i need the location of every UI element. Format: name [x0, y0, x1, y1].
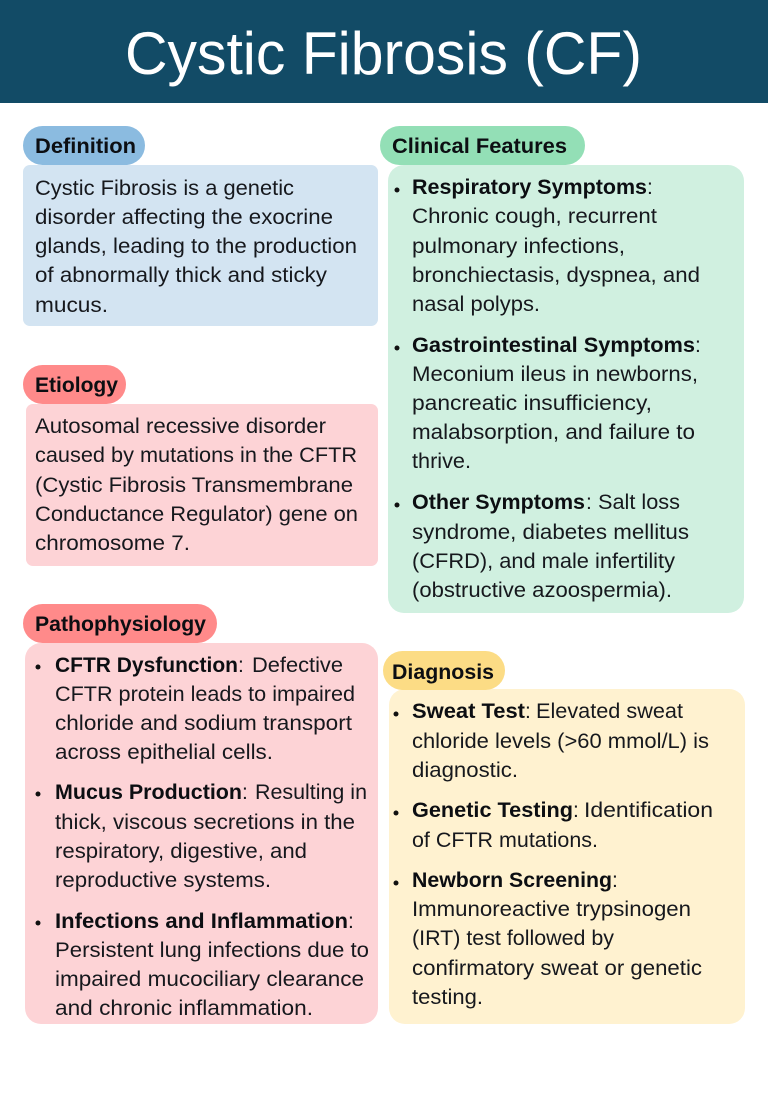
heading: clinical features: Clinical Features	[392, 135, 567, 158]
text: definition body: mucus.	[35, 294, 108, 317]
bullet: other symptoms: :	[586, 491, 592, 514]
bullet: sweat test: diagnostic.	[412, 759, 518, 782]
bullet: CFTR dysfunction: chloride and sodium transport	[55, 712, 352, 735]
title: Cystic Fibrosis (CF)	[125, 20, 642, 87]
bullet: mucus production: Resulting in	[255, 781, 367, 804]
bullet: CFTR dysfunction: :	[238, 654, 244, 677]
text: definition body: disorder affecting the exocrine	[35, 206, 333, 229]
bullet: sweat test	[394, 700, 709, 782]
bullet: other symptoms	[394, 491, 689, 602]
text: definition body: glands, leading to the production	[35, 235, 357, 258]
bullet: genetic testing	[394, 799, 713, 852]
bullet: mucus production: thick, viscous secretions in the	[55, 811, 355, 834]
bullet: other symptoms: (obstructive azoospermia).	[412, 579, 672, 602]
bullet: sweat test: chloride levels (>60 mmol/L) is	[412, 730, 709, 753]
text: etiology body	[35, 415, 358, 555]
bullet: genetic testing: Genetic Testing	[412, 799, 573, 822]
bullet: genetic testing: of CFTR mutations.	[412, 829, 598, 852]
bullet: respiratory symptoms	[394, 176, 700, 316]
panel: etiology	[23, 365, 378, 566]
bullet: infections and inflammation	[36, 910, 369, 1020]
text: definition body: Cystic Fibrosis is a genetic	[35, 177, 294, 200]
heading: diagnosis	[383, 651, 505, 690]
bullet: other symptoms: Salt loss	[598, 491, 680, 514]
bullet: mucus production: :	[242, 781, 248, 804]
bullet: gastrointestinal symptoms	[394, 334, 701, 473]
heading: diagnosis: Diagnosis	[392, 661, 494, 684]
bullet: newborn screening: confirmatory sweat or genetic	[412, 957, 702, 980]
bullet: CFTR dysfunction: across epithelial cells.	[55, 741, 273, 764]
text: etiology body: Autosomal recessive disorder	[35, 415, 326, 438]
bullet: infections and inflammation: Persistent lung infections due to	[55, 939, 369, 962]
heading: clinical features	[380, 126, 585, 165]
text: etiology body: (Cystic Fibrosis Transmembrane	[35, 474, 353, 497]
panel: pathophysiology	[23, 604, 378, 1024]
bullet: gastrointestinal symptoms: malabsorption, and failure to	[412, 421, 695, 444]
bullet: CFTR dysfunction	[36, 654, 355, 764]
bullet: newborn screening: Newborn Screening	[412, 869, 612, 892]
bullet: newborn screening: testing.	[412, 986, 483, 1009]
bullet: infections and inflammation: Infections and Inflammation	[55, 910, 348, 933]
bullet: newborn screening: Immunoreactive trypsinogen	[412, 898, 691, 921]
bullet: respiratory symptoms: pulmonary infections,	[412, 235, 625, 258]
text: etiology body: Conductance Regulator) gene on	[35, 503, 358, 526]
bullet: mucus production	[36, 781, 367, 892]
bullet: newborn screening: :	[612, 869, 618, 892]
text: etiology body: chromosome 7.	[35, 532, 190, 555]
bullet: sweat test: Elevated sweat	[536, 700, 683, 723]
bullet: gastrointestinal symptoms: Meconium ileus in newborns,	[412, 363, 698, 386]
bullet: respiratory symptoms: bronchiectasis, dyspnea, and	[412, 264, 700, 287]
bullet: genetic testing: Identification	[584, 799, 713, 822]
bullet: respiratory symptoms: Respiratory Symptoms	[412, 176, 647, 199]
bullet: newborn screening: (IRT) test followed by	[412, 927, 615, 950]
title banner	[0, 0, 768, 103]
bullet: CFTR dysfunction: CFTR Dysfunction	[55, 654, 238, 677]
bullet: other symptoms: Other Symptoms	[412, 491, 585, 514]
bullet: respiratory symptoms: Chronic cough, recurrent	[412, 205, 657, 228]
bullet: gastrointestinal symptoms: :	[695, 334, 701, 357]
heading: pathophysiology	[23, 604, 217, 643]
heading: definition: Definition	[35, 135, 136, 158]
text: definition body: of abnormally thick and sticky	[35, 264, 328, 287]
bullet: mucus production: Mucus Production	[55, 781, 242, 804]
bullet: newborn screening	[394, 869, 702, 1009]
panel: clinical features	[380, 126, 744, 613]
text: etiology body: caused by mutations in the CFTR	[35, 444, 357, 467]
bullet: mucus production: reproductive systems.	[55, 869, 271, 892]
bullet: gastrointestinal symptoms: pancreatic insufficiency,	[412, 392, 652, 415]
bullet: mucus production: respiratory, digestive, and	[55, 840, 307, 863]
heading: definition	[23, 126, 145, 165]
bullet: sweat test: Sweat Test	[412, 700, 525, 723]
bullet: genetic testing: :	[573, 799, 579, 822]
bullet: CFTR dysfunction: CFTR protein leads to impaired	[55, 683, 355, 706]
bullet: respiratory symptoms: :	[647, 176, 653, 199]
bullet: infections and inflammation: impaired mucociliary clearance	[55, 968, 364, 991]
heading: etiology	[23, 365, 126, 404]
bullet: gastrointestinal symptoms: Gastrointestinal Symptoms	[412, 334, 695, 357]
bullet: infections and inflammation: and chronic inflammation.	[55, 997, 313, 1020]
bullet: gastrointestinal symptoms: thrive.	[412, 450, 471, 473]
bullet: infections and inflammation: :	[348, 910, 354, 933]
heading: pathophysiology: Pathophysiology	[35, 613, 206, 636]
text: definition body	[35, 177, 357, 317]
bullet: respiratory symptoms: nasal polyps.	[412, 293, 540, 316]
bullet: other symptoms: syndrome, diabetes mellitus	[412, 521, 689, 544]
panel: definition	[23, 126, 378, 326]
bullet: other symptoms: (CFRD), and male infertility	[412, 550, 676, 573]
panel: diagnosis	[383, 651, 745, 1024]
bullet: sweat test: :	[525, 700, 531, 723]
heading: etiology: Etiology	[35, 374, 118, 397]
bullet: CFTR dysfunction: Defective	[252, 654, 343, 677]
